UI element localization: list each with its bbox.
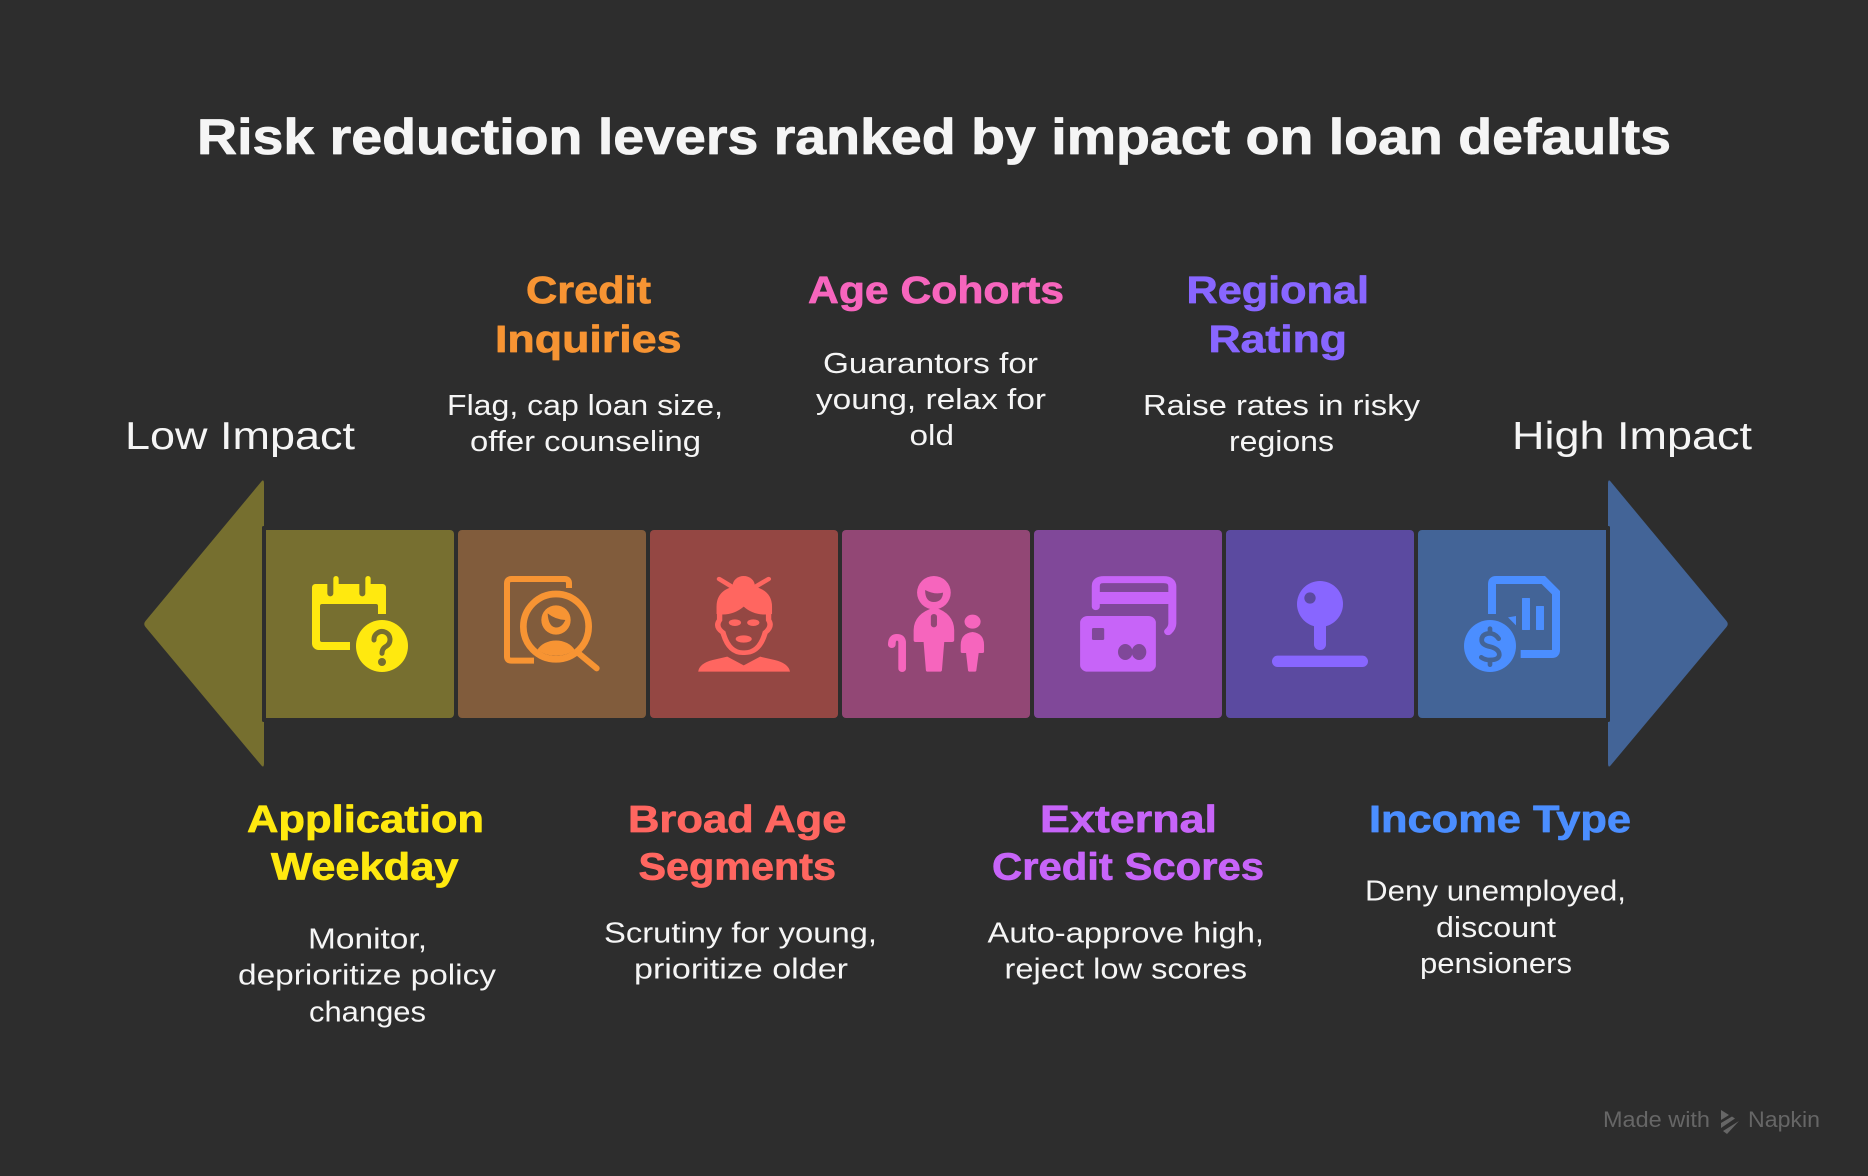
description [1143, 390, 1421, 458]
lever: Credit Inquiries [447, 270, 723, 718]
lever: External Credit Scores [988, 530, 1264, 986]
description: reject low scores [1004, 954, 1247, 986]
description [816, 348, 1046, 452]
tile [1418, 530, 1606, 718]
description [1365, 876, 1626, 980]
heading: Rating [1208, 319, 1347, 361]
tile [1226, 530, 1414, 718]
description: pensioners [1420, 948, 1572, 980]
icon: calendar with question mark [312, 576, 408, 672]
heading: Broad Age [628, 799, 846, 841]
icon: report with dollar coin [1464, 580, 1556, 672]
heading: Application [247, 799, 484, 841]
heading [247, 799, 484, 888]
description: Flag, cap loan size, [447, 390, 723, 422]
description: old [910, 420, 954, 452]
icon: credit cards [1080, 580, 1172, 672]
description: regions [1229, 426, 1334, 458]
icon: map pin [1272, 581, 1368, 667]
footer: Made with Napkin: Napkin [1748, 1107, 1820, 1132]
tile [458, 530, 646, 718]
description: Scrutiny for young, [604, 918, 877, 950]
icon: adult, child and cane [892, 576, 984, 672]
lever: Broad Age Segments [604, 530, 877, 986]
heading: Income Type [1369, 799, 1631, 841]
heading: Regional [1186, 270, 1369, 312]
tile [266, 530, 454, 718]
arrow: low impact end [144, 480, 264, 767]
heading: Weekday [271, 846, 458, 888]
heading: Segments [638, 846, 836, 888]
heading: Credit [526, 270, 651, 312]
description: Auto-approve high, [988, 918, 1264, 950]
heading: Credit Scores [992, 846, 1264, 888]
lever: Income Type [1365, 526, 1631, 980]
icon: napkin logo [1721, 1110, 1739, 1134]
arrow: high impact end [1608, 480, 1728, 767]
description: Raise rates in risky [1143, 390, 1421, 422]
description: deprioritize policy [238, 960, 497, 992]
heading: External [1040, 799, 1217, 841]
lever: Application Weekday [238, 526, 497, 1028]
label: High Impact: High Impact [1512, 415, 1752, 458]
tile [650, 530, 838, 718]
label: Low Impact: Low Impact [125, 415, 355, 458]
icon: document with magnifier and person [507, 579, 597, 668]
heading: Inquiries [495, 319, 682, 361]
description: Monitor, [308, 924, 427, 956]
description: prioritize older [634, 954, 848, 986]
description [447, 390, 723, 458]
footer: Made with Napkin: Made with [1603, 1107, 1710, 1132]
lever: Age Cohorts [808, 270, 1064, 718]
heading [628, 799, 846, 888]
description: offer counseling [470, 426, 701, 458]
lever: Regional Rating [1143, 270, 1421, 718]
heading [1186, 270, 1369, 361]
heading: Age Cohorts [808, 270, 1064, 312]
heading [992, 799, 1264, 888]
icon: woman with hair bun [698, 576, 790, 672]
description: young, relax for [816, 384, 1046, 416]
description: Deny unemployed, [1365, 876, 1626, 908]
tile [1034, 530, 1222, 718]
description [238, 924, 497, 1028]
description: Guarantors for [823, 348, 1038, 380]
description: changes [309, 996, 426, 1028]
heading [495, 270, 682, 361]
description [604, 918, 877, 986]
description [988, 918, 1264, 986]
title: Risk reduction levers ranked by impact on loan defaults [197, 109, 1671, 165]
footer: Made with Napkin [1603, 1107, 1820, 1134]
description: discount [1436, 912, 1556, 944]
tile [842, 530, 1030, 718]
